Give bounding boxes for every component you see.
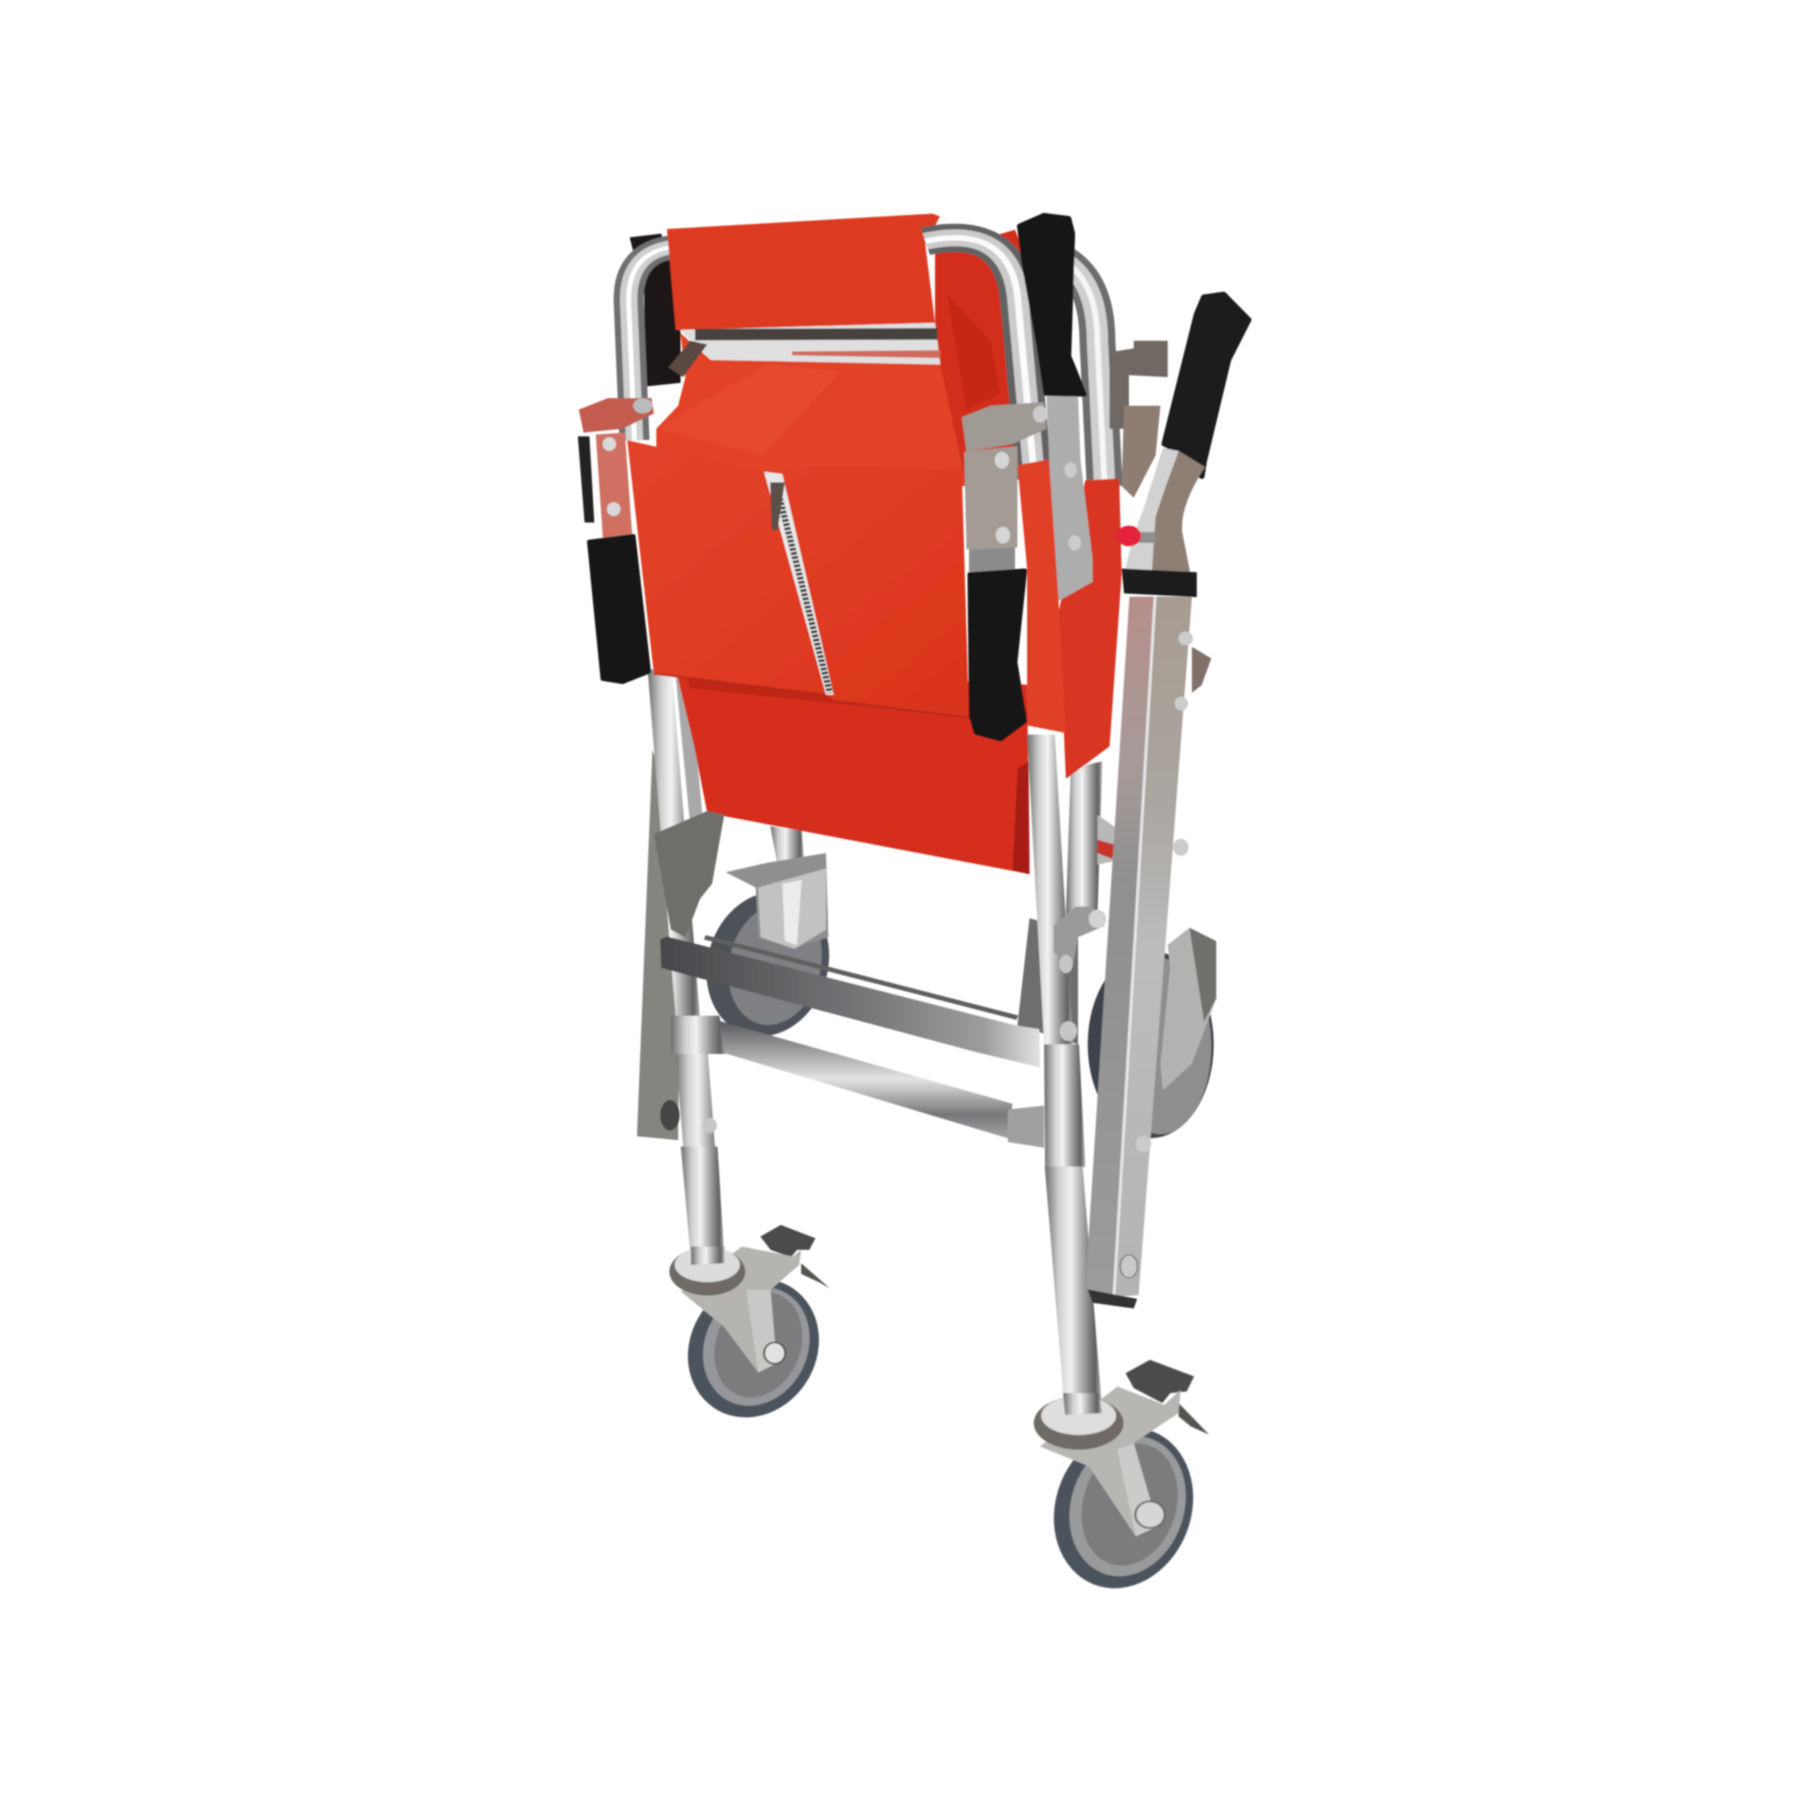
- left grip assembly: [578, 398, 654, 682]
- folding beam: [1085, 597, 1192, 1308]
- fork: [681, 1247, 801, 1372]
- headrest flap: [667, 214, 940, 330]
- strap: [1122, 568, 1197, 597]
- rear right tube: [1066, 761, 1102, 918]
- foreground seat parts: [578, 215, 1249, 779]
- latch: [1054, 907, 1105, 964]
- lower structure: [648, 669, 1106, 1300]
- right arch tube: [925, 238, 1034, 479]
- left leg upper: [648, 669, 700, 1018]
- right leg upper: [1027, 734, 1073, 1044]
- horizontal zip: [668, 323, 940, 377]
- upper rear frame and fabric: [629, 214, 1168, 498]
- right sleeve: [1044, 1044, 1085, 1167]
- dark headrest corner: [630, 234, 681, 387]
- beam bolts: [1120, 1255, 1138, 1278]
- hinge plates: [654, 811, 724, 937]
- rear arch tube: [1020, 247, 1105, 486]
- swivel dome: [669, 1248, 745, 1296]
- axle bolt: [1135, 1501, 1165, 1528]
- left arch tube: [629, 247, 673, 440]
- right black grip: [970, 570, 1025, 740]
- latch: [1192, 647, 1211, 693]
- brake pedal: [1126, 1360, 1194, 1403]
- rear rod: [705, 937, 1017, 1018]
- rear caster left: [695, 826, 841, 1043]
- right hinge: [1017, 918, 1078, 1044]
- front pocket: [627, 440, 969, 718]
- right caster: [1034, 1360, 1209, 1597]
- side fabric: [935, 230, 1044, 486]
- lower right leg and casters: [669, 1147, 1209, 1597]
- right leg: [1045, 1167, 1102, 1406]
- axle bolt: [764, 1342, 785, 1364]
- pocket hem: [654, 674, 969, 718]
- vertical zip: [764, 472, 834, 695]
- right joint: [1008, 1106, 1044, 1148]
- chair illustration: [578, 214, 1249, 1597]
- rear caster right: [1088, 928, 1216, 1138]
- near fabric strip: [1017, 459, 1066, 733]
- left lower leg: [675, 1044, 727, 1300]
- centre handle: [1020, 215, 1084, 394]
- inner left tube: [676, 677, 702, 826]
- left black grip: [589, 536, 649, 682]
- wheel: [1039, 1419, 1208, 1597]
- right grip assembly: [962, 402, 1081, 740]
- back rest fabric: [656, 333, 967, 486]
- beam edge highlight: [1112, 597, 1157, 1297]
- left joint: [671, 1016, 727, 1054]
- fork: [1040, 1386, 1181, 1536]
- bracket behind handle: [1110, 341, 1168, 429]
- seat shadow: [1013, 761, 1030, 874]
- rear structure: [637, 750, 1216, 1140]
- left foot bolt: [660, 1100, 680, 1131]
- rail handle: [1164, 294, 1249, 477]
- curved rail: [1124, 448, 1179, 574]
- brake pedal: [760, 1225, 815, 1257]
- left caster: [669, 1225, 834, 1427]
- round crossbar: [714, 1020, 1013, 1138]
- wheel: [673, 1269, 834, 1427]
- far fabric strip: [1059, 479, 1122, 779]
- red knob: [1117, 526, 1156, 546]
- left folding plate: [637, 750, 681, 1140]
- foot cap: [1088, 1289, 1137, 1308]
- silver lock plate: [1047, 394, 1093, 601]
- swivel dome: [1034, 1396, 1123, 1450]
- bolts: [1060, 1021, 1077, 1041]
- flat crossbar: [660, 937, 1040, 1067]
- left leg: [681, 1147, 724, 1260]
- seat fabric: [676, 669, 1030, 874]
